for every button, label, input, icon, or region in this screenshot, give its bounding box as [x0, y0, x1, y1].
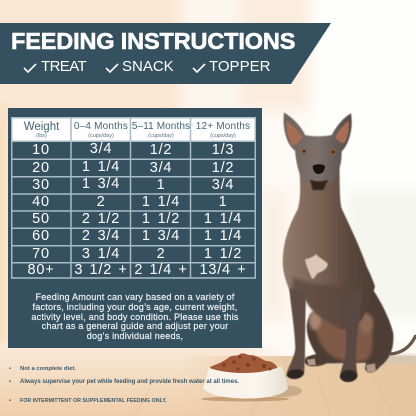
row: 60 lbs: 1 3/4 [142, 228, 180, 244]
column header: weight [24, 121, 60, 139]
paws [287, 358, 357, 382]
column header: weight: Weight [24, 121, 59, 133]
row: 80+ lbs: 3 1/2 + [74, 262, 128, 278]
note: not a complete diet [9, 366, 76, 372]
note: not a complete diet: • [9, 366, 11, 372]
row: 60 lbs: 1 1/4 [204, 228, 242, 244]
row: 40 lbs: 1 [219, 194, 227, 210]
row: 40 lbs [32, 194, 227, 210]
label: snack: SNACK [122, 58, 174, 75]
column header: 0-4 months [74, 121, 128, 139]
feeding note: Feeding Amount can vary based on a variety of [35, 292, 235, 302]
icon: check snack [106, 63, 118, 73]
row: 80+ lbs: 2 1/4 + [134, 262, 188, 278]
note: intermittent feeding [9, 398, 167, 404]
row: 50 lbs: 1 1/4 [204, 211, 242, 227]
hind leg and haunch [305, 273, 393, 373]
row: 60 lbs: 60 [32, 228, 50, 244]
photo: bowl of kibble [201, 353, 302, 402]
front right leg [340, 290, 362, 382]
row: 70 lbs: 2 [157, 246, 165, 262]
banner: feeding instructions [0, 23, 331, 84]
note: supervise: Always supervise your pet while feeding and provide fresh water at all times. [20, 378, 239, 384]
row: 10 lbs: 1/3 [212, 142, 234, 158]
column header: 0-4 months: (cups/day) [88, 133, 114, 139]
row: 30 lbs: 30 [32, 177, 50, 193]
label: treat: TREAT [41, 58, 86, 75]
column header: 5-11 months: (cups/day) [148, 133, 174, 139]
column header: 0-4 months: 0–4 Months [74, 121, 128, 132]
column header: 12+ months: 12+ Months [196, 121, 250, 132]
feeding note: dog’s individual needs, [87, 331, 183, 341]
row: 30 lbs: 1 [157, 177, 165, 193]
row: 40 lbs: 1 1/4 [142, 194, 180, 210]
light toes [307, 358, 376, 373]
eyes [302, 149, 306, 154]
table grid [11, 117, 256, 279]
lower chest shadow [292, 277, 362, 328]
icon: check treat [24, 63, 36, 73]
row: 20 lbs: 3/4 [150, 160, 172, 176]
row: 50 lbs: 1 1/2 [142, 211, 180, 227]
chest white patch [305, 254, 328, 279]
column header: 12+ months [196, 121, 250, 139]
icon: check topper [192, 63, 206, 73]
warm belly and thigh [315, 310, 373, 362]
left ear inside [287, 121, 302, 145]
notes list: Not a complete diet. [20, 366, 76, 372]
row: 50 lbs [32, 211, 242, 227]
row: 40 lbs: 2 [97, 194, 105, 210]
row: 30 lbs: 1 3/4 [82, 176, 120, 192]
feeding note: activity level, and body condition. Please use this [31, 312, 239, 322]
photo: hairless dog [282, 112, 416, 383]
torso and neck [283, 168, 375, 330]
row: 60 lbs: 2 3/4 [82, 228, 120, 244]
tail [390, 335, 416, 354]
row: 10 lbs: 3/4 [90, 141, 112, 157]
row: 70 lbs [32, 246, 242, 262]
row: 20 lbs [32, 159, 234, 176]
column header: weight: (lbs) [36, 133, 47, 139]
row: 50 lbs: 2 1/2 [82, 211, 120, 227]
front left leg [287, 288, 306, 379]
row: 50 lbs: 50 [32, 211, 50, 227]
feeding table [11, 117, 256, 279]
row: 70 lbs: 3 1/4 [82, 246, 120, 262]
feeding note: chart as a general guide and adjust per your [42, 321, 228, 331]
left thigh highlight [309, 310, 321, 330]
label: topper: TOPPER [209, 58, 270, 75]
column header: 5-11 months: 5–11 Months [132, 121, 190, 132]
row: 80+ lbs: 13/4 + [199, 262, 247, 278]
row: 60 lbs [32, 228, 242, 244]
column header: 12+ months: (cups/day) [210, 133, 236, 139]
row: 10 lbs: 10 [32, 142, 50, 158]
row: 40 lbs: 40 [32, 194, 50, 210]
row: 20 lbs: 1 1/4 [82, 159, 120, 175]
heading: FEEDING INSTRUCTIONS [11, 28, 295, 54]
notes list [9, 366, 239, 404]
right thigh highlight [360, 313, 373, 333]
feeding note: factors, including your dog’s age, current weight, [33, 302, 237, 312]
row: 20 lbs: 20 [32, 160, 50, 176]
row: 70 lbs: 70 [32, 246, 50, 262]
row: 30 lbs [32, 176, 234, 193]
note: intermittent feeding: • [9, 398, 11, 404]
row: 10 lbs [32, 141, 234, 158]
right ear inside [335, 121, 349, 143]
row: 30 lbs: 3/4 [212, 177, 234, 193]
row: 20 lbs: 1/2 [212, 160, 234, 176]
nose and mouth [313, 164, 325, 174]
row: 80+ lbs [28, 262, 247, 278]
row: 80+ lbs: 80+ [28, 262, 54, 278]
notes list: FOR INTERMITTENT OR SUPPLEMENTAL FEEDING ONLY. [20, 398, 167, 404]
feeding note [31, 292, 239, 342]
row: 10 lbs: 1/2 [150, 142, 172, 158]
head and ears [284, 112, 352, 184]
panel: feeding chart [8, 108, 262, 348]
column header: 5-11 months [132, 121, 190, 139]
note: supervise: • [9, 378, 11, 384]
row: 70 lbs: 1 1/2 [204, 246, 242, 262]
